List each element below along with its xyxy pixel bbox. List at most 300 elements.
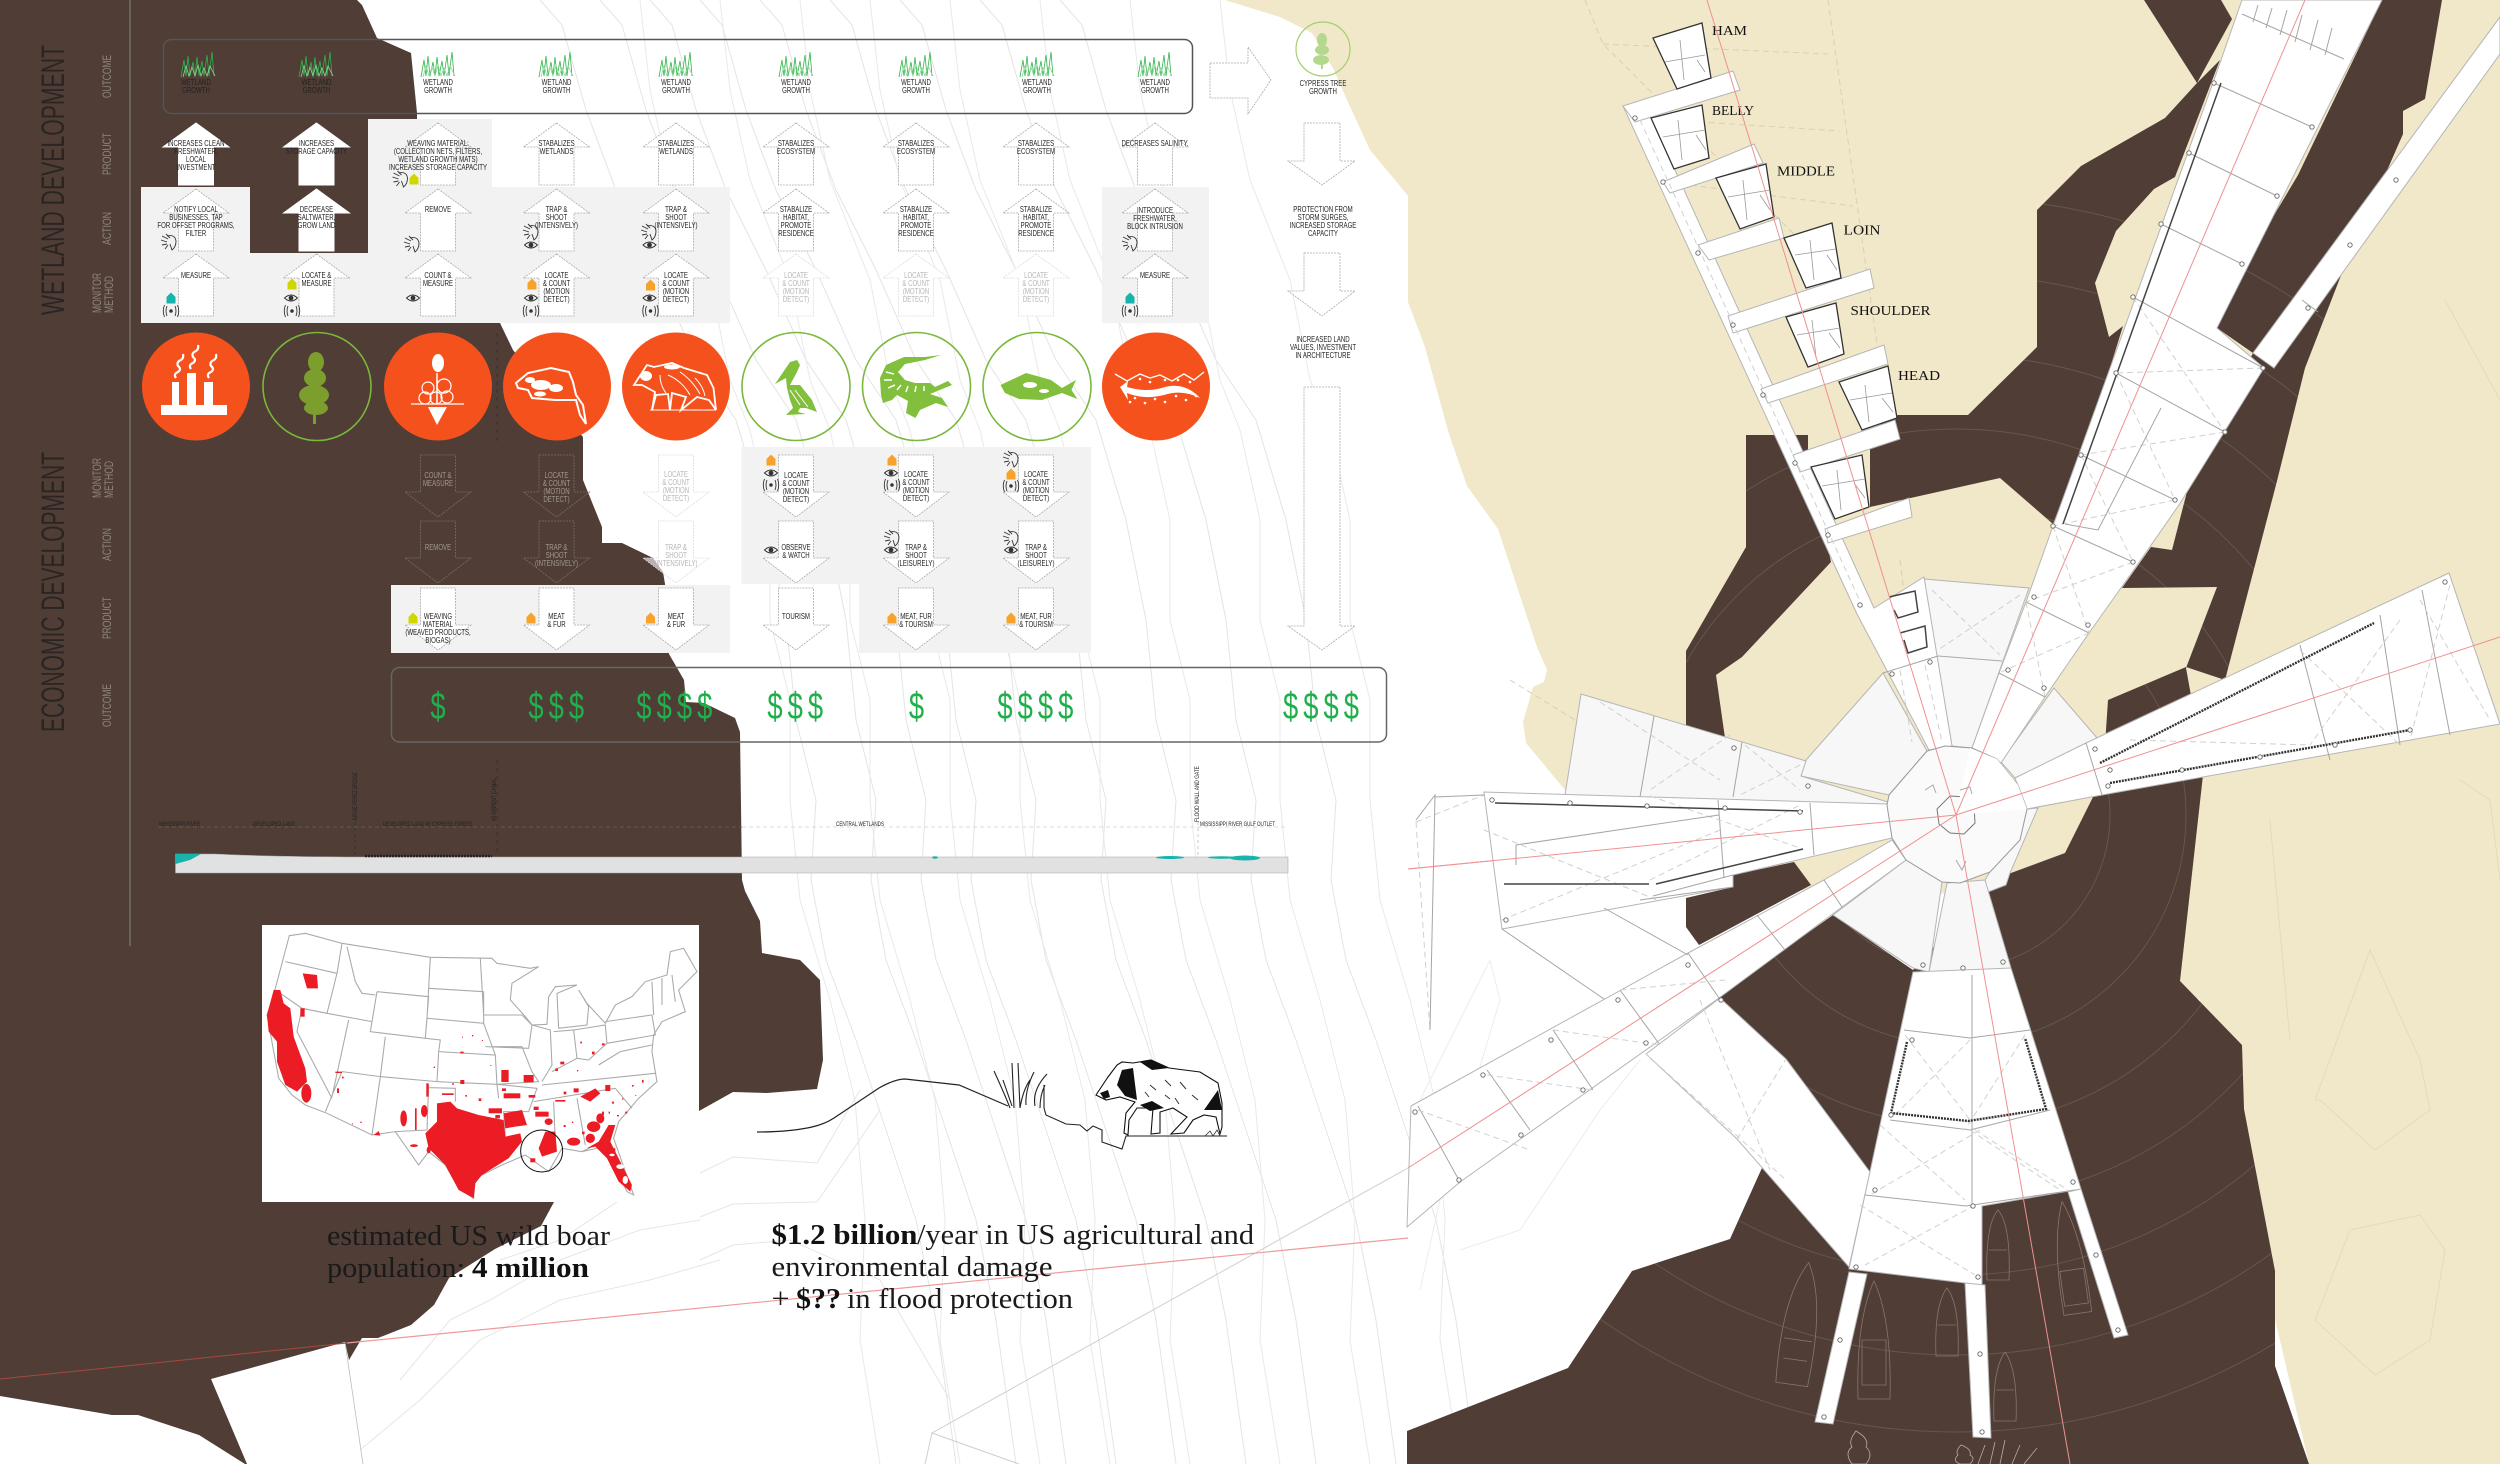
arrow: trap and shoot b: SHOOT [665,214,687,222]
arrow: faded locate e: LOCATE [1024,272,1048,280]
sand contours and survey lines [1510,0,2500,1375]
arrow: weaving material products: MATERIAL [423,621,453,629]
arrow: meat and fur a [524,588,590,650]
row labels: wetland: MONITOR [90,273,104,313]
arrow: faded remove [405,521,471,583]
arrow: stabalizes wetlands a: STABALIZES [538,140,575,148]
arrow: weaving material products: BIOGAS) [425,637,451,645]
arrow: faded locate on brown: DETECT) [543,496,570,504]
dollar ratings: $$$$ [997,686,1078,728]
arrow: locate and count f [763,455,829,517]
arrow: locate and count h: LOCATE [1024,471,1048,479]
dollar ratings: $$$ [767,686,828,728]
arrow: locate and count f: DETECT) [783,496,809,504]
arm: north-west building spine [1623,71,1952,750]
arrows: action row, wetland [157,189,1188,251]
outcome labels: WETLAND [781,79,811,87]
arrow: meat and fur b: & FUR [667,621,685,629]
arrow: trap leisurely b: SHOOT [1025,552,1047,560]
arrow: stabalizes ecosystem c [1003,123,1069,185]
map: wild boar range [262,925,699,1202]
arrow: trap leisurely a [883,521,949,583]
dollar ratings: $$$ [528,686,589,728]
arrow: stabalizes ecosystem a: ECOSYSTEM [777,148,815,156]
arrow: toward cypress tree [1210,47,1271,114]
arrow: introduce freshwater: BLOCK INTRUSION [1127,223,1183,231]
arrow: faded trap on white [643,521,709,583]
arrow: increases clean freshwater [163,123,229,185]
arrow: stabalize habitat c: STABALIZE [1020,206,1052,214]
outcome box: wetland growth [164,40,1192,114]
row labels: wetland: ACTION [100,212,114,245]
arrow: meat fur tourism b: & TOURISM [1019,621,1053,629]
arrow: weaving material products [405,588,471,650]
label: cypress tree growth: GROWTH [1309,88,1337,96]
unit labels: MIDDLE [1777,164,1835,180]
hub: central decagon [1887,746,2027,883]
grass tuft [994,1063,1047,1108]
circle: factory [142,332,250,440]
arrow: faded locate e: (MOTION [1023,288,1049,296]
circle: wild boar [622,332,730,440]
arrow: stabalize habitat b [883,189,949,251]
brown river: west channel [1686,435,1831,745]
text: agricultural damage cost: environmental damage [772,1252,1052,1283]
arrow: faded locate d: LOCATE [904,272,928,280]
arrow: stabalizes wetlands a: WETLANDS [540,148,574,156]
arrow: measure a: MEASURE [181,272,211,280]
arrow: trap leisurely a: (LEISURELY) [897,560,935,568]
arrow: trap and shoot b: (INTENSIVELY) [654,222,698,230]
arrow: decrease saltwater: DECREASE [300,206,334,214]
arrow: locate and count f: & COUNT [782,480,810,488]
arrow: faded locate c [763,254,829,316]
arrow: stabalizes ecosystem a [763,123,829,185]
arrow: faded count and measure: MEASURE [423,480,453,488]
text: wild boar population: population: [327,1253,465,1284]
red axis lines under plan [1408,815,1956,1168]
circle: alligator [862,332,970,440]
row labels: economic: ACTION [100,528,114,561]
arm: south pavilion [1849,968,2081,1285]
arrow: notify local businesses: FILTER [186,230,206,238]
row labels: wetland: OUTCOME [100,55,114,98]
circle: fish [983,332,1091,440]
section labels: DEVELOPED LAND W/ CYPRESS FOREST [383,821,473,828]
arrow: observe and watch: OBSERVE [781,544,811,552]
arrow: stabalize habitat c [1003,189,1069,251]
arrow: locate and count g: & COUNT [902,479,930,487]
unit: shoulder [1786,303,1844,367]
outcome labels: WETLAND [1022,79,1052,87]
piers [1815,1189,2128,1438]
arrow: stabalize habitat a: PROMOTE [781,222,812,230]
arrow: introduce freshwater: INTRODUCE [1137,207,1173,215]
section labels: MISSISSIPPI RIVER [159,821,200,828]
arrow: stabalize habitat a: HABITAT, [783,214,809,222]
outcome box: economic value [392,668,1386,742]
section labels: CENTRAL WETLANDS [836,821,884,828]
arrow: trap leisurely b: TRAP & [1025,544,1047,552]
arrow: trap leisurely a: SHOOT [905,552,927,560]
outcome labels: WETLAND [302,79,331,87]
arrow: locate and count b: & COUNT [662,280,690,288]
fan wedge north [1924,579,2029,748]
arrow: tourism [763,588,829,650]
brown land mass on the left [0,0,823,1464]
arm: thin northeast walkway [2253,17,2500,368]
arrow: stabalizes wetlands b: WETLANDS [659,148,693,156]
arrow: weaving material: WEAVING MATERIAL: [407,140,469,148]
arrow: count and measure: MEASURE [423,280,453,288]
arrow: locate and count a [524,254,590,316]
text: agricultural damage cost: in flood protection [847,1284,1073,1315]
unit labels [1712,24,1940,384]
arrow: stabalizes wetlands a [524,123,590,185]
arrow: cypress to protection [1288,123,1355,185]
arrow: remove: REMOVE [425,206,451,214]
arm: west pavilion [1416,792,1892,1030]
text: wild boar population [327,1221,611,1284]
circle: saltwater intrusion [1102,332,1210,440]
label: protection from storm surges: CAPACITY [1308,230,1338,238]
arrow: stabalize habitat c: PROMOTE [1021,222,1052,230]
row labels: economic: MONITOR [90,458,104,498]
arrow: stabalizes ecosystem b [883,123,949,185]
row labels: economic [90,458,116,727]
arrow: stabalize habitat b: HABITAT, [903,214,929,222]
circle: nutria [503,332,611,440]
row labels: economic: OUTCOME [100,684,114,727]
arrow: locate and count g: DETECT) [903,495,929,503]
outcome labels: WETLAND [542,79,571,87]
arrow: locate and count g: (MOTION [903,487,929,495]
arrow: meat fur tourism a: MEAT, FUR [900,613,932,621]
arrow: meat and fur b [643,588,709,650]
arrow: meat and fur a: & FUR [547,621,566,629]
circle: cypress tree [263,332,371,440]
arrow: trap leisurely b: (LEISURELY) [1017,560,1055,568]
section ground [176,854,1288,873]
outcome labels: GROWTH [1023,87,1051,95]
arrow: trap and shoot b: TRAP & [665,206,687,214]
arrow: trap and shoot a: TRAP & [546,206,568,214]
outcome labels: GROWTH [662,87,690,95]
arrow: locate and count g [883,455,949,517]
arrow: locate and count g: LOCATE [904,471,928,479]
arrow: meat fur tourism a: & TOURISM [899,621,933,629]
arrow: locate and count h: & COUNT [1022,479,1050,487]
label: increased land values: VALUES, INVESTMENT [1290,344,1357,352]
text: agricultural damage cost: $1.2 billion [772,1220,918,1251]
row labels: wetland: PRODUCT [100,133,114,175]
arrow: locate and measure: MEASURE [301,280,332,288]
arrow: introduce freshwater [1122,189,1188,251]
method icons: wetland rows [161,171,1138,317]
unit: lower [1811,455,1869,519]
arrow: observe and watch [763,521,829,583]
brown river: east channel [2105,0,2442,745]
arrow: faded locate c: DETECT) [783,296,809,304]
arrow: faded locate e: DETECT) [1023,296,1049,304]
arrows: monitor row, wetland [163,254,1188,316]
arm: southwest walkway [1407,840,1906,1227]
arrow: increases storage capacity: INCREASES [299,140,334,148]
moored boats [1775,1200,2092,1421]
arrow: increases clean freshwater: INCREASES CLEAN [167,140,225,148]
fan wedge southwest [1833,860,1942,972]
outcome labels: GROWTH [1141,87,1169,95]
arrow: measure a [163,254,229,316]
unit: ham [1653,23,1711,89]
species circles [142,332,1210,440]
fan wedge east [2001,688,2098,778]
text: agricultural damage cost [772,1220,1254,1315]
arrow: locate and count b: DETECT) [663,296,689,304]
arrow: locate and count a: LOCATE [545,272,569,280]
arrow: meat and fur b: MEAT [668,613,685,621]
arrow: trap leisurely a: TRAP & [905,544,927,552]
brown river: lower basin [1407,775,2309,1464]
arm: south diagonal panel [1502,908,1870,1267]
arrow: locate and count f: (MOTION [783,488,809,496]
row labels: economic: METHOD [102,461,116,498]
method icons: economic rows [408,451,1019,624]
arrow: trap and shoot a: (INTENSIVELY) [535,222,578,230]
outcome labels: GROWTH [902,87,930,95]
row labels: wetland: METHOD [102,276,116,313]
panel: economic product highlight right [859,584,1091,653]
arrow: decrease saltwater: SALTWATER, [298,214,335,222]
arrow: decrease saltwater: GROW LAND [298,222,335,230]
arrow: locate and count a: DETECT) [543,296,570,304]
arrow: notify local businesses: NOTIFY LOCAL [174,206,218,214]
arrow: decreases salinity: DECREASES SALINITY. [1121,140,1189,148]
arrow: stabalize habitat b: PROMOTE [901,222,932,230]
arrow: locate and measure [284,254,350,316]
label: increased land values: IN ARCHITECTURE [1295,352,1351,360]
arrow: protection to land value [1288,253,1355,316]
arrow: stabalizes wetlands b [643,123,709,185]
arrow: weaving material products: (WEAVED PRODUCTS, [405,629,471,637]
fan wedge northwest [1801,673,1927,795]
panel: salinity highlight [1102,187,1209,323]
unit: loin [1784,223,1841,288]
arrow: faded locate on brown [524,455,590,517]
building units [1651,23,1897,519]
arrow: stabalize habitat a: RESIDENCE [778,230,814,238]
arrows: product row, wetland [163,123,1189,185]
arrow: trap leisurely b [1003,521,1069,583]
arrow: increases storage capacity [284,123,350,185]
heading: economic development: ECONOMIC DEVELOPMENT [35,452,71,732]
arrow: meat fur tourism b [1003,588,1069,650]
text: agricultural damage cost: /year in US agricultural and [917,1220,1254,1251]
dollar ratings: $ [909,686,929,728]
structural nodes [1413,81,2447,1434]
section labels: 40 ARPENT CANAL [491,778,498,821]
arrow: faded trap on brown: SHOOT [546,552,568,560]
arrow: locate and count a: & COUNT [543,280,571,288]
outcome labels: WETLAND [661,79,691,87]
arrow: increases storage capacity: STORAGE CAPACITY [286,148,347,156]
arrow: stabalize habitat b: RESIDENCE [898,230,934,238]
unit labels: HAM [1712,24,1748,39]
unit labels: BELLY [1712,104,1754,119]
arrow: stabalize habitat a [763,189,829,251]
arrow: faded locate c: LOCATE [784,272,808,280]
arrow: notify local businesses [157,189,235,251]
section labels: DEVELOPED LAND [253,821,295,828]
arrow: stabalizes wetlands b: STABALIZES [658,140,694,148]
arrow: trap and shoot a [524,189,590,251]
arrow: faded locate on brown: (MOTION [543,488,570,496]
arrow: faded trap on brown [524,521,590,583]
outcome labels: GROWTH [303,87,330,95]
arrow: tourism: TOURISM [782,613,810,621]
dollar ratings: $$$$ [636,686,717,728]
label: cypress tree growth: CYPRESS TREE [1300,80,1347,88]
arrow: stabalize habitat c: RESIDENCE [1018,230,1054,238]
text: wild boar population: 4 million [472,1253,589,1284]
arrow: stabalizes ecosystem c: ECOSYSTEM [1017,148,1055,156]
arrow: trap and shoot a: SHOOT [546,214,568,222]
map: red range areas [267,973,644,1198]
arrow: weaving material products: WEAVING [424,613,452,621]
arrow: faded locate on white: (MOTION [663,487,689,495]
unit labels: LOIN [1844,224,1880,238]
arm: northeast main pavilion [1972,0,2382,763]
sidebar divider [129,0,131,946]
section strip [158,333,1288,873]
fan wedge southeast [1985,808,2038,892]
arrow: faded locate on white [643,455,709,517]
arrow: stabalizes ecosystem b: STABALIZES [898,140,934,148]
boar [1096,1060,1222,1136]
arrow: faded locate d: (MOTION [903,288,929,296]
contour lines background [360,0,1640,1464]
panel: economic monitor and action highlight [742,447,1091,584]
arrow: observe and watch: & WATCH [782,552,810,560]
arrow: locate and count b: (MOTION [663,288,689,296]
illustration: terrain line, grass and boar [757,1060,1227,1149]
arrow: introduce freshwater: FRESHWATER, [1133,215,1177,223]
section labels: FLOOD WALL AND GATE [1194,766,1201,822]
arrow: faded trap on white: TRAP & [665,544,687,552]
unit labels: SHOULDER [1850,304,1931,319]
arrow: stabalize habitat a: STABALIZE [780,206,812,214]
arrow: stabalizes ecosystem a: STABALIZES [778,140,814,148]
arrow: weaving material: (COLLECTION NETS, FILTERS, [394,148,482,156]
section labels: JUDGE PEREZ BRIDGE [352,772,359,821]
outcome labels: WETLAND [901,79,931,87]
panel: economic product highlight left [391,585,730,653]
arrow: stabalizes ecosystem c: STABALIZES [1018,140,1054,148]
arrow: stabalize habitat c: HABITAT, [1023,214,1049,222]
arrow: locate and count b [643,254,709,316]
text: agricultural damage cost: $?? [796,1284,841,1315]
section labels [159,766,1275,828]
arrow: faded locate on white: DETECT) [663,495,689,503]
arrow: stabalizes ecosystem b: ECOSYSTEM [897,148,935,156]
arrow: meat fur tourism b: MEAT, FUR [1020,613,1052,621]
outcome labels: GROWTH [424,87,452,95]
dollar ratings: $ [430,686,451,728]
arrow: locate and count h [1003,455,1069,517]
arrow: faded locate e: & COUNT [1022,280,1050,288]
label: protection from storm surges: PROTECTION FROM [1293,206,1353,214]
row labels: wetland [90,55,116,313]
label: protection from storm surges: INCREASED STORAGE [1290,222,1357,230]
fan wedge upper west [1565,694,1888,805]
concentric site arcs [1600,204,2324,1432]
arrow: count and measure [405,254,471,316]
arm top ticks [2242,5,2344,59]
arrow: weaving material [389,123,487,185]
red axis lines over plan [1408,0,2500,1464]
arrow: faded locate c: (MOTION [783,288,809,296]
arrow: count and measure: COUNT & [424,272,452,280]
circle: pelican [742,332,850,440]
section labels: MISSISSIPPI RIVER GULF OUTLET [1200,821,1275,828]
section water [176,854,1260,864]
icon: cypress tree circle [1296,22,1350,76]
text: wild boar population: estimated US wild boar [327,1221,611,1252]
unit: middle [1716,164,1774,229]
text: agricultural damage cost: + [772,1284,790,1315]
arrow: faded trap on brown: TRAP & [546,544,568,552]
grass icons [181,52,1172,77]
arrow: measure b: MEASURE [1140,272,1170,280]
arrow: remove [405,189,471,251]
outcome labels [181,79,1170,95]
arrow: faded count and measure: COUNT & [424,472,452,480]
arrow: faded locate d: DETECT) [903,296,929,304]
arrow: notify local businesses: BUSINESSES, TAP [169,214,223,222]
dollar ratings [430,686,1364,728]
arrow: faded locate e [1003,254,1069,316]
arm: east pavilion [2015,573,2500,809]
arrow: locate and count h: DETECT) [1023,495,1049,503]
arrow: meat fur tourism a [883,588,949,650]
unit: head [1839,366,1897,430]
arrow: increases clean freshwater: FRESHWATER, [174,148,218,156]
map outline and states [267,933,697,1198]
red axis line across lower page [0,1238,1408,1379]
arrow: land value to economic outcome [1288,387,1355,650]
arrow: faded locate on white: LOCATE [664,471,688,479]
label: protection from storm surges: STORM SURGES, [1298,214,1348,222]
arrow: faded locate c: & COUNT [782,280,810,288]
outcome labels: WETLAND [181,79,211,87]
arrows: action row, economic [405,521,1069,583]
panel: wetland highlight [141,119,730,323]
arrows: product row, economic [405,588,1069,650]
arrow: faded locate d [883,254,949,316]
brown river: small bend [1686,862,1811,945]
arrow: stabalize habitat b: STABALIZE [900,206,932,214]
arrow: decreases salinity [1121,123,1189,185]
outcome labels: GROWTH [782,87,810,95]
arrow: locate and count h: (MOTION [1023,487,1049,495]
outcome labels: GROWTH [182,87,210,95]
arrow: faded count and measure [405,455,471,517]
outcome labels: GROWTH [543,87,570,95]
arrow: notify local businesses: FOR OFFSET PROGRAMS, [157,222,235,230]
circle: water plant [384,332,492,440]
arrow: locate and count f: LOCATE [784,472,808,480]
fan wedge south [1929,880,2011,975]
